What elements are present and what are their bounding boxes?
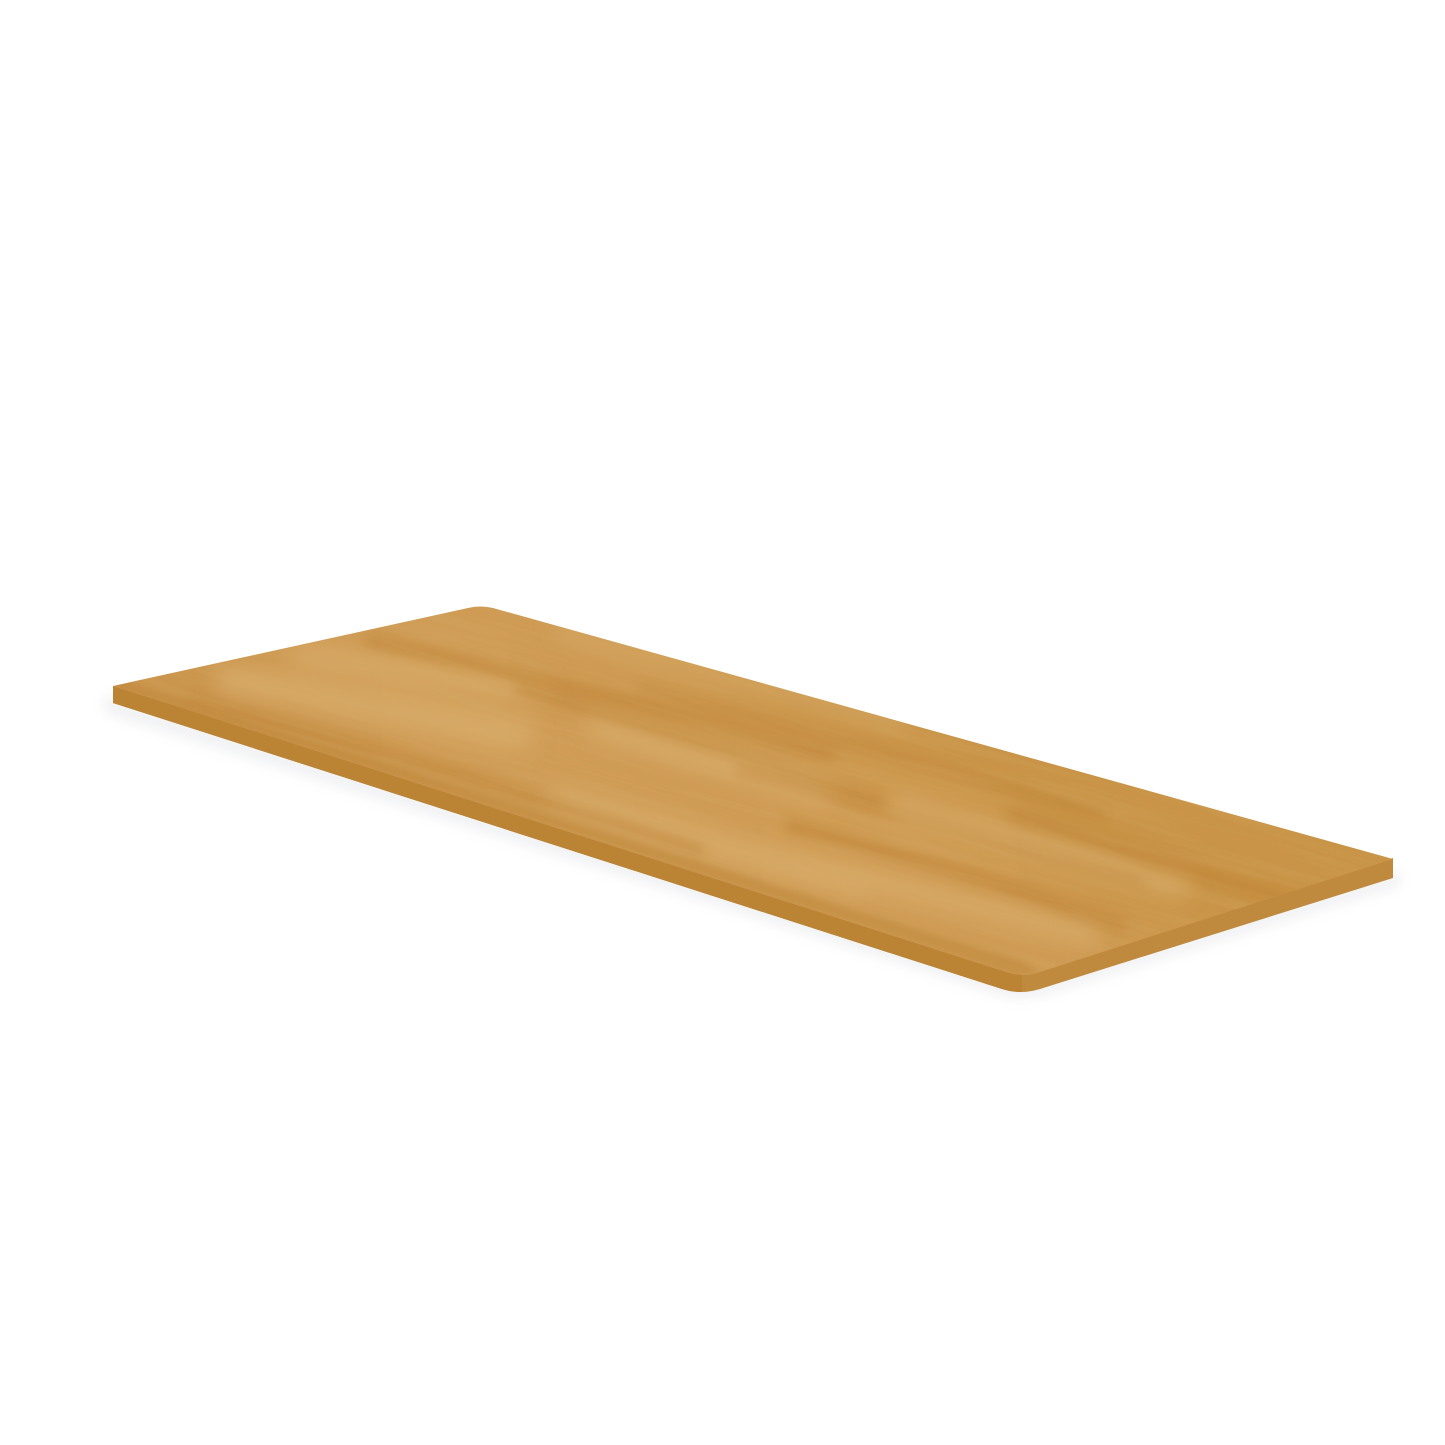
top face base — [113, 606, 1392, 975]
illustration: wooden board on white background — [107, 606, 1397, 997]
darker left part of side edge — [113, 686, 1022, 992]
soft shadow under board — [100, 696, 1400, 998]
dark bands — [190, 640, 1310, 925]
board — [113, 606, 1393, 992]
front edge shading of top face — [113, 682, 1040, 975]
fine grain texture — [1042, 788, 1090, 801]
board top face with grain — [113, 606, 1392, 975]
light bands — [230, 630, 1180, 935]
board side edge — [113, 686, 1393, 992]
